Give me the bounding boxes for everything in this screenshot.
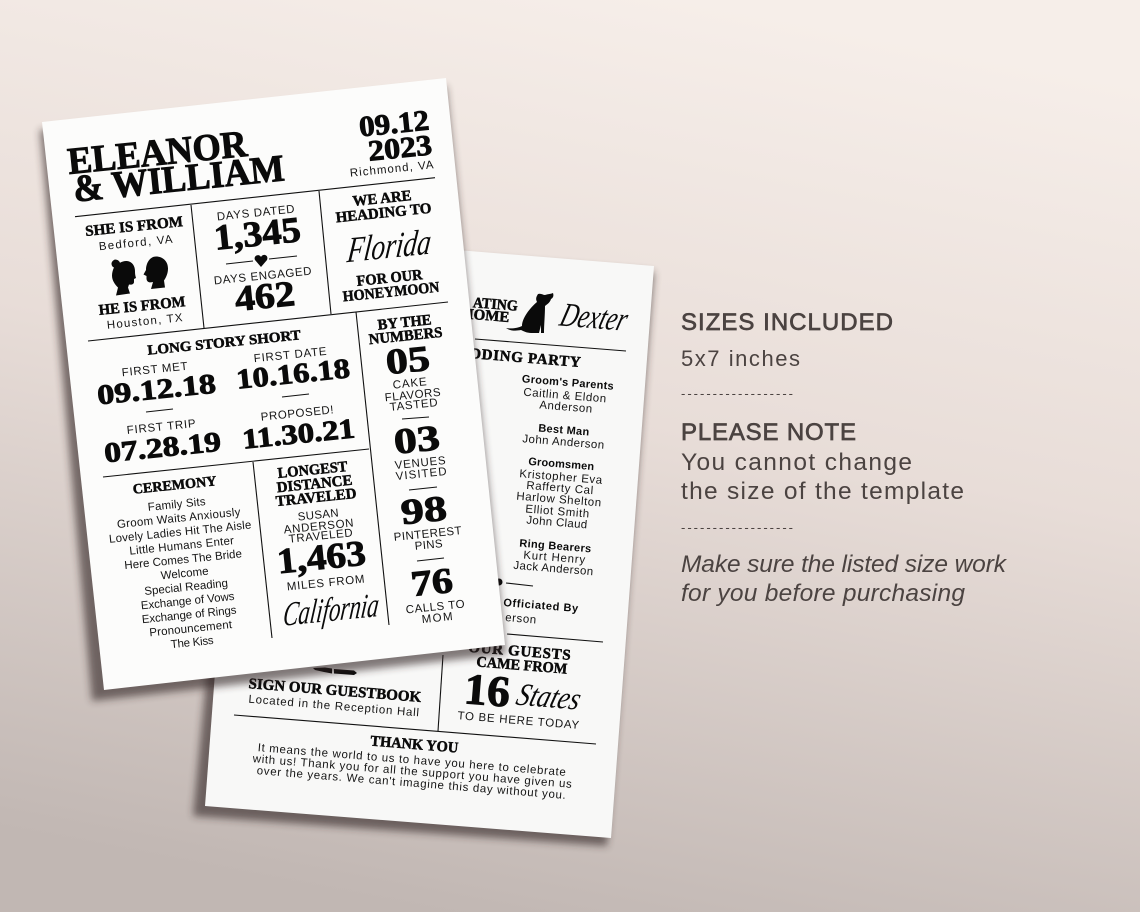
- title: [66, 123, 286, 211]
- panel: our guests came from 16 states: 16: [462, 664, 512, 717]
- sizes included note: ------------------: [681, 386, 793, 401]
- panel: ceremony: CEREMONY: [132, 474, 217, 498]
- panel: by the numbers: [368, 312, 465, 626]
- panel: days dated and engaged: [212, 204, 312, 319]
- panel: our guests came from 16 states: TO BE HERE TODAY: [457, 710, 580, 732]
- panel: honeymoon: HEADING TO: [335, 201, 432, 226]
- panel: longest distance traveled: SUSAN: [297, 507, 339, 524]
- purchase reminder: [681, 551, 1008, 607]
- sizes included note: 5x7 inches: [681, 346, 800, 371]
- panel: ceremony: Exchange of Rings: [141, 605, 237, 626]
- panel: wedding party: erson: [505, 612, 537, 626]
- panel: ceremony: Little Humans Enter: [129, 535, 235, 558]
- panel: our guests came from 16 states: OUR GUESTS: [468, 640, 572, 664]
- panel: longest distance traveled: TRAVELED: [288, 527, 353, 546]
- please note: [681, 419, 964, 535]
- panel: long story short: PROPOSED!: [260, 404, 334, 424]
- icon: dog: [506, 293, 553, 333]
- back card: [193, 233, 654, 846]
- title: & WILLIAM: [71, 147, 286, 211]
- panel: long story short: 09.12.18: [96, 369, 217, 411]
- panel: ceremony: Lovely Ladies Hit The Aisle: [108, 519, 252, 546]
- icon: man silhouette: [144, 256, 168, 289]
- panel: our guests came from 16 states: [457, 640, 586, 732]
- header: celebrating at home with dog Dexter: ATING: [472, 295, 519, 315]
- purchase reminder: Make sure the listed size work: [681, 551, 1008, 578]
- panel: long story short: 07.28.19: [103, 427, 222, 469]
- please note: PLEASE NOTE: [681, 419, 856, 446]
- panel: she is from / he is from: HE IS FROM: [98, 294, 186, 319]
- panel: by the numbers: 76: [409, 560, 455, 604]
- panel: long story short: FIRST MET: [121, 361, 188, 379]
- panel: by the numbers: PINS: [414, 538, 444, 553]
- panel: guestbook: SIGN OUR GUESTBOOK: [248, 676, 422, 706]
- purchase reminder: for you before purchasing: [681, 580, 965, 607]
- panel: days dated and engaged: DAYS DATED: [216, 204, 295, 223]
- please note: ------------------: [681, 520, 793, 535]
- panel: thank you: THANK YOU: [370, 734, 459, 757]
- panel: ceremony: Exchange of Vows: [140, 591, 235, 612]
- panel: days dated and engaged: 462: [233, 273, 297, 319]
- panel: wedding party: Caitlin & Eldon: [523, 387, 607, 405]
- panel: by the numbers: PINTEREST: [393, 525, 462, 544]
- panel: she is from / he is from: Houston, TX: [106, 312, 183, 332]
- panel: wedding party: Harlow Shelton: [516, 491, 602, 509]
- panel: wedding party: [443, 344, 614, 626]
- date and location: Richmond, VA: [349, 159, 434, 180]
- panel: long story short: FIRST TRIP: [126, 418, 196, 437]
- panel: ceremony: Pronouncement: [149, 619, 233, 639]
- panel: she is from / he is from: Bedford, VA: [98, 234, 173, 253]
- panel: by the numbers: FLAVORS: [384, 387, 441, 404]
- panel: by the numbers: CAKE: [392, 376, 428, 392]
- panel: honeymoon: Florida: [345, 222, 433, 270]
- date and location: 09.12: [358, 105, 431, 144]
- panel: longest distance traveled: MILES FROM: [286, 574, 365, 593]
- panel: by the numbers: 05: [384, 338, 432, 382]
- panel: by the numbers: TASTED: [389, 397, 438, 414]
- panel: ceremony: Family Sits: [147, 496, 206, 514]
- please note: the size of the template: [681, 478, 964, 505]
- panel: long story short: FIRST DATE: [253, 346, 327, 365]
- panel: longest distance traveled: TRAVELED: [275, 486, 357, 510]
- panel: longest distance traveled: 1,463: [275, 533, 368, 581]
- sizes included note: [681, 309, 893, 401]
- panel: ceremony: Welcome: [160, 566, 209, 582]
- panel: long story short: LONG STORY SHORT: [147, 328, 302, 359]
- front card sheet: [42, 78, 505, 690]
- panel: by the numbers: NUMBERS: [368, 325, 443, 348]
- panel: wedding party: John Anderson: [522, 433, 605, 452]
- panel: guestbook: [248, 668, 422, 719]
- panel: long story short: [96, 328, 356, 469]
- back card sheet: [205, 233, 654, 838]
- panel: by the numbers: MOM: [421, 611, 453, 626]
- panel: by the numbers: 03: [392, 417, 442, 462]
- panel: longest distance traveled: California: [281, 586, 381, 634]
- panel: wedding party: Kurt Henry: [523, 550, 586, 566]
- panel: wedding party: Jack Anderson: [513, 560, 594, 578]
- panel: longest distance traveled: LONGEST: [277, 459, 348, 482]
- panel: wedding party: Anderson: [539, 399, 593, 416]
- panel: wedding party: Groomsmen: [528, 456, 595, 473]
- panel: longest distance traveled: ANDERSON: [283, 518, 354, 537]
- panel: longest distance traveled: DISTANCE: [276, 473, 353, 496]
- panel: by the numbers: 98: [399, 488, 449, 532]
- panel: wedding party: Kristopher Eva: [519, 468, 603, 487]
- header: celebrating at home with dog Dexter: [461, 293, 633, 338]
- panel: honeymoon: HONEYMOON: [342, 280, 440, 305]
- panel: wedding party: WEDDING PARTY: [443, 344, 582, 371]
- panel: honeymoon: [335, 188, 440, 305]
- icon: woman silhouette: [112, 260, 136, 296]
- panel: wedding party: Officiated By: [503, 597, 579, 615]
- panel: thank you: It means the world to us to have you here to celebrate: [257, 742, 566, 779]
- panel: thank you: over the years. We can't imagine this day without you.: [256, 765, 566, 802]
- panel: wedding party: Ring Bearers: [519, 538, 592, 555]
- panel: she is from / he is from: SHE IS FROM: [85, 214, 184, 240]
- header: celebrating at home with dog Dexter: HOME: [461, 306, 510, 326]
- panel: by the numbers: VISITED: [395, 466, 447, 483]
- panel: guestbook: Located in the Reception Hall: [248, 694, 419, 719]
- panel: ceremony: Here Comes The Bride: [124, 548, 243, 572]
- please note: You cannot change: [681, 449, 912, 476]
- panel: long story short: 11.30.21: [241, 413, 356, 456]
- icon: heart fragment: [496, 578, 502, 586]
- panel: ceremony: Groom Waits Anxiously: [116, 507, 241, 531]
- panel: our guests came from 16 states: States: [513, 676, 586, 716]
- panel: wedding party: John Claud: [526, 515, 588, 531]
- panel: wedding party: Groom's Parents: [521, 373, 614, 393]
- panel: by the numbers: BY THE: [377, 312, 432, 334]
- panel: longest distance traveled: [275, 459, 381, 634]
- panel: our guests came from 16 states: CAME FROM: [476, 654, 568, 678]
- date and location: [349, 105, 434, 180]
- panel: wedding party: Rafferty Cal: [526, 480, 594, 497]
- panel: wedding party: Elliot Smith: [525, 503, 590, 521]
- date and location: 2023: [367, 129, 434, 168]
- sizes included note: SIZES INCLUDED: [681, 309, 893, 336]
- panel: by the numbers: CALLS TO: [405, 599, 465, 616]
- panel: thank you: with us! Thank you for all the support you have given us: [251, 753, 572, 791]
- header: celebrating at home with dog Dexter: Dexter: [555, 296, 633, 338]
- panel: honeymoon: FOR OUR: [356, 267, 423, 290]
- panel: by the numbers: VENUES: [394, 455, 446, 472]
- title: ELEANOR: [66, 123, 249, 183]
- panel: honeymoon: WE ARE: [352, 188, 412, 210]
- panel: long story short: 10.16.18: [235, 353, 351, 396]
- panel: days dated and engaged: DAYS ENGAGED: [213, 266, 312, 287]
- panel: ceremony: The Kiss: [170, 635, 214, 651]
- panel: days dated and engaged: 1,345: [212, 209, 303, 258]
- panel: ceremony: Special Reading: [144, 578, 229, 598]
- panel: she is from / he is from: [85, 214, 186, 332]
- panel: wedding party: Best Man: [538, 422, 590, 439]
- front card: [40, 78, 506, 701]
- icon: heart: [255, 255, 267, 267]
- panel: ceremony: [108, 474, 252, 651]
- icon: pen: [313, 668, 357, 675]
- panel: thank you: [251, 734, 572, 802]
